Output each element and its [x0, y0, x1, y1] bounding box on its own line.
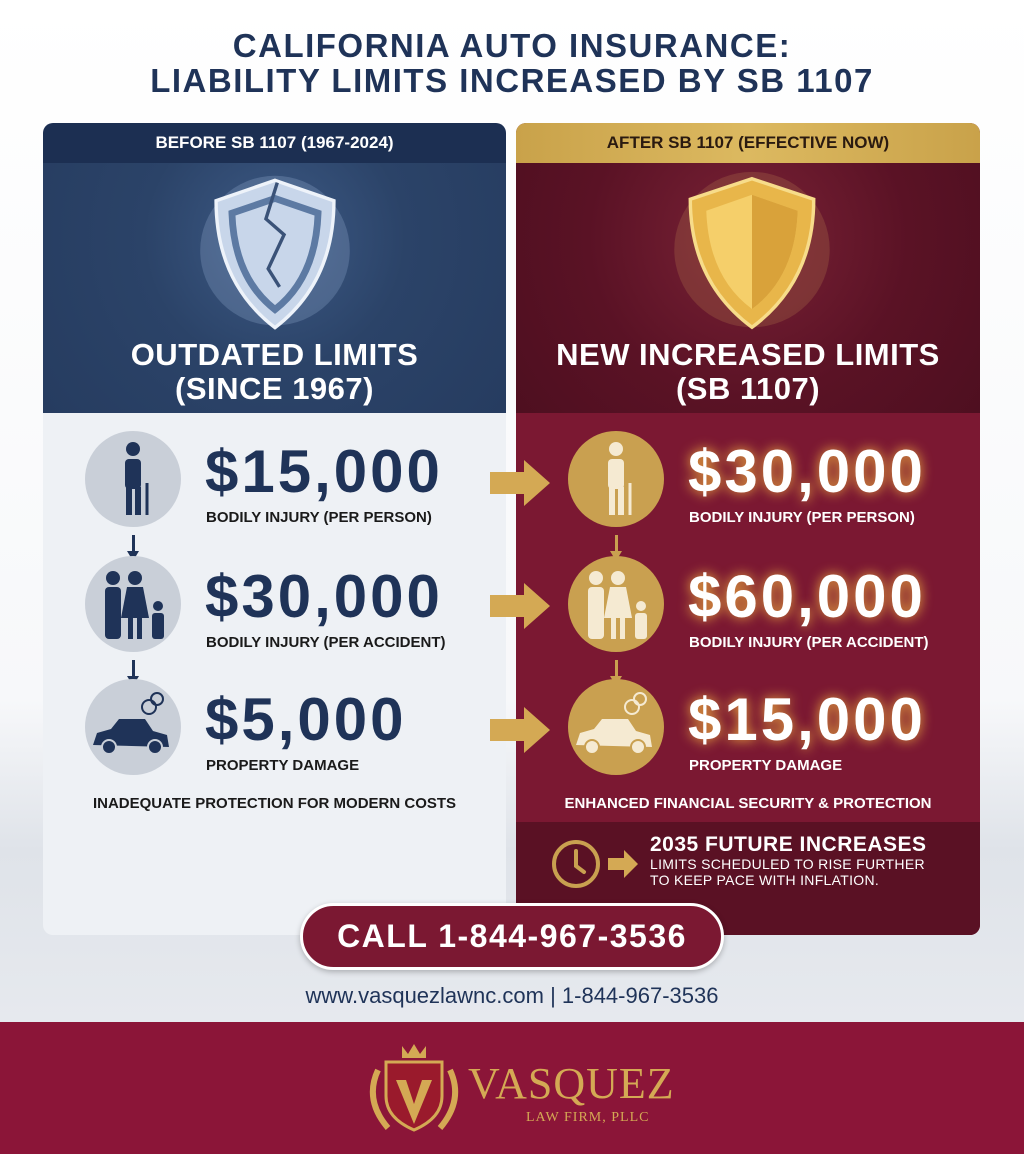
icon: injured person gold [568, 431, 664, 527]
arrow: down 2 [127, 660, 139, 680]
after heading: NEW INCREASED LIMITS [556, 337, 940, 372]
arrow: gold down 2 [610, 660, 622, 680]
icon: crashed car [85, 679, 181, 775]
label: PROPERTY DAMAGE [206, 757, 359, 774]
arrow: down 1 [127, 535, 139, 556]
panel: after [516, 123, 980, 935]
after heading [556, 337, 940, 406]
website line: www.vasquezlawnc.com | 1-844-967-3536 [306, 983, 718, 1008]
label: BODILY INJURY (PER ACCIDENT) [689, 634, 928, 651]
arrow: gold down 1 [610, 535, 622, 556]
before heading: (SINCE 1967) [175, 371, 374, 406]
row: after per person [568, 431, 930, 527]
amount 30000: $30,000 [688, 438, 926, 505]
future text: LIMITS SCHEDULED TO RISE FURTHER [650, 856, 925, 872]
footer [0, 1022, 1024, 1154]
icon: injured person [85, 431, 181, 527]
amount 60000: $60,000 [688, 563, 926, 630]
CTA button [300, 903, 724, 970]
logo text: VASQUEZ [468, 1059, 675, 1108]
row: after property [568, 679, 930, 775]
after header [516, 123, 980, 163]
before header [43, 123, 506, 163]
logo: LAW FIRM, PLLC [526, 1110, 649, 1125]
after hero [516, 163, 980, 413]
label: BODILY INJURY (PER ACCIDENT) [206, 634, 445, 651]
future increases box [516, 822, 980, 935]
future text: 2035 FUTURE INCREASES [650, 833, 927, 856]
label: BODILY INJURY (PER PERSON) [689, 509, 915, 526]
icon: crest [370, 1044, 458, 1132]
amount 30000: $30,000 [205, 563, 443, 630]
panel: before [43, 123, 506, 935]
before heading [131, 337, 418, 406]
amount 15000 new: $15,000 [688, 686, 926, 753]
row: before property [85, 679, 407, 775]
after footer text: ENHANCED FINANCIAL SECURITY & PROTECTION [565, 795, 931, 812]
amount 5000: $5,000 [205, 686, 407, 753]
icon: cracked shield [200, 176, 350, 330]
icon: family [85, 556, 181, 652]
future text: TO KEEP PACE WITH INFLATION. [650, 872, 879, 888]
row: before per person [85, 431, 443, 527]
before header: BEFORE SB 1107 (1967-2024) [155, 133, 394, 152]
row: after per accident [568, 556, 930, 652]
CTA button: CALL 1-844-967-3536 [337, 918, 687, 954]
amount 15000: $15,000 [205, 438, 443, 505]
title [150, 27, 874, 99]
future text [650, 833, 927, 888]
before footer text: INADEQUATE PROTECTION FOR MODERN COSTS [93, 795, 456, 812]
icon: clock [552, 840, 600, 888]
after header: AFTER SB 1107 (EFFECTIVE NOW) [607, 133, 889, 152]
title: LIABILITY LIMITS INCREASED BY SB 1107 [150, 62, 874, 99]
row: before per accident [85, 556, 445, 652]
before hero [43, 163, 506, 413]
label: BODILY INJURY (PER PERSON) [206, 509, 432, 526]
icon: crashed car gold [568, 679, 664, 775]
before heading: OUTDATED LIMITS [131, 337, 418, 372]
after heading: (SB 1107) [676, 371, 820, 406]
icon: family gold [568, 556, 664, 652]
label: PROPERTY DAMAGE [689, 757, 842, 774]
icon: gold shield [674, 172, 830, 330]
logo [370, 1044, 675, 1132]
arrow: small gold [608, 850, 638, 878]
title: CALIFORNIA AUTO INSURANCE: [233, 27, 791, 64]
arrows: gold right [490, 460, 550, 753]
